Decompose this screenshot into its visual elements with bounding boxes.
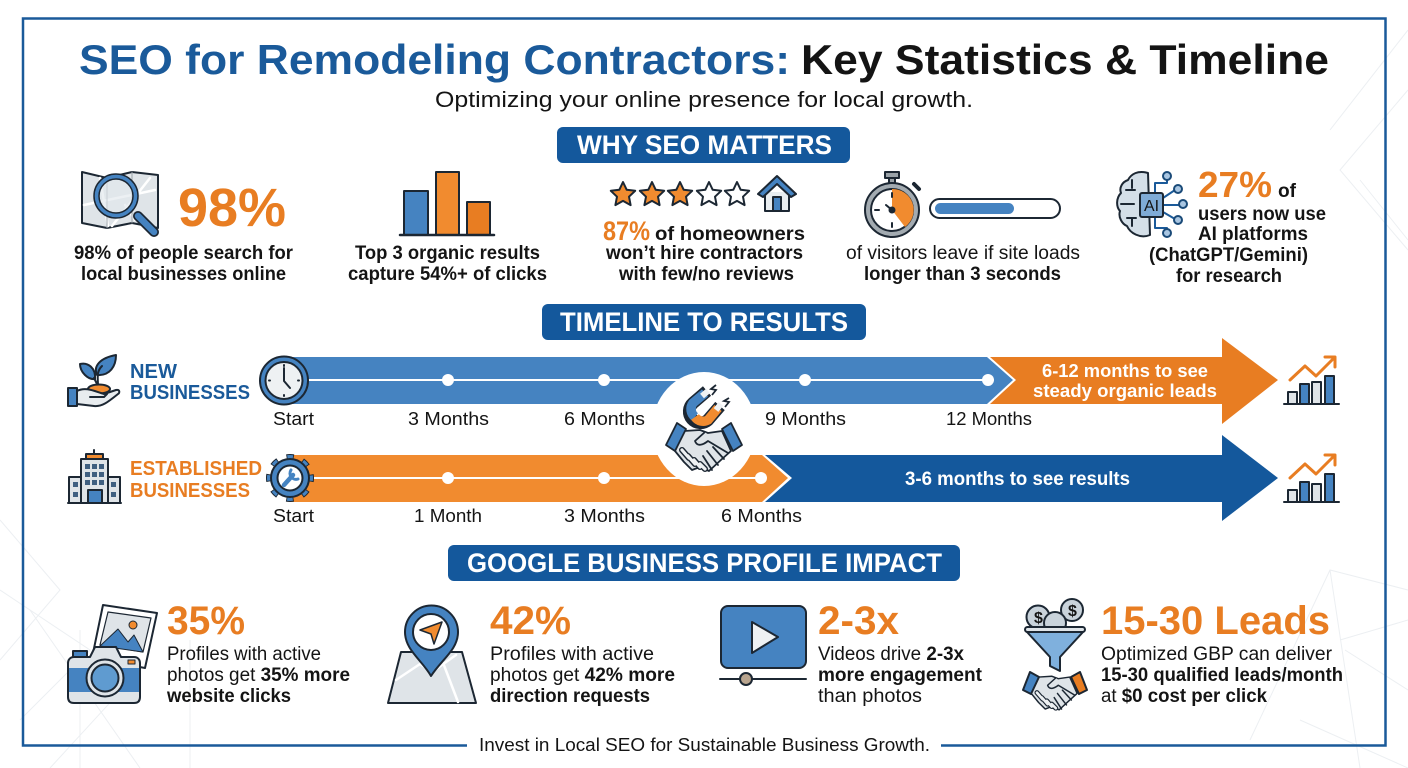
caption: 98% of people search for xyxy=(74,243,294,264)
caption: at $0 cost per click xyxy=(1101,686,1267,707)
icon: funnel, coins and handshake xyxy=(1023,599,1087,710)
tick labels xyxy=(273,506,802,526)
icon: gear and wrench xyxy=(270,458,310,498)
heading: why SEO matters: WHY SEO MATTERS xyxy=(577,130,832,160)
title: SEO for Remodeling Contractors: xyxy=(79,36,790,83)
icon: map pin xyxy=(388,606,476,703)
caption: photos get 35% more xyxy=(167,665,350,686)
tick labels xyxy=(273,409,1032,429)
panel: AI platforms xyxy=(1117,164,1326,287)
caption xyxy=(818,644,983,707)
stat: 42% xyxy=(490,599,571,643)
icon: AI brain xyxy=(1117,172,1187,237)
arrow text: 3-6 months to see results xyxy=(905,469,1130,490)
caption: than photos xyxy=(818,686,922,707)
title: Key Statistics & Timeline xyxy=(801,36,1329,83)
panel: photos 35% xyxy=(68,599,350,707)
panel: reviews xyxy=(603,176,805,285)
footer tagline: Invest in Local SEO for Sustainable Business Growth. xyxy=(479,735,930,755)
caption xyxy=(1101,644,1343,707)
icon: stopwatch xyxy=(865,172,919,237)
panel: top 3 results xyxy=(348,172,547,285)
label: BUSINESSES xyxy=(130,382,250,404)
caption: Profiles with active xyxy=(490,644,654,665)
caption xyxy=(490,644,675,707)
caption xyxy=(846,243,1080,285)
icon: progress bar xyxy=(930,199,1060,218)
caption: Profiles with active xyxy=(167,644,321,665)
stat: 98%: 98% xyxy=(178,178,286,238)
heading: timeline to results: TIMELINE TO RESULTS xyxy=(560,307,848,337)
timeline row: new businesses xyxy=(68,338,1339,429)
tick labels: Start xyxy=(273,506,314,526)
panel: video 2-3x xyxy=(720,599,983,707)
tick labels: Start xyxy=(273,409,314,429)
tick labels: 3 Months xyxy=(408,409,489,429)
caption: local businesses online xyxy=(81,264,286,285)
tick labels: 3 Months xyxy=(564,506,645,526)
stat: 2-3x xyxy=(818,599,899,643)
icon: map and magnifier xyxy=(82,172,158,232)
caption: Videos drive 2-3x xyxy=(818,644,964,665)
icon: bar chart xyxy=(400,172,494,235)
caption: more engagement xyxy=(818,665,983,686)
caption: of homeowners xyxy=(655,224,805,245)
tick labels: 9 Months xyxy=(765,409,846,429)
caption: capture 54%+ of clicks xyxy=(348,264,547,285)
stat: 27%: 27% xyxy=(1198,164,1272,205)
icon: office building xyxy=(68,450,121,503)
icon: camera and photo xyxy=(68,605,157,703)
label: ESTABLISHED xyxy=(130,458,262,480)
caption: (ChatGPT/Gemini) xyxy=(1149,245,1308,266)
icon: funnel, coins and handshake: $ xyxy=(1068,603,1077,620)
arrow text: 6-12 months to see xyxy=(1042,361,1208,381)
caption: 87% xyxy=(603,216,650,246)
caption: with few/no reviews xyxy=(618,264,794,285)
caption: longer than 3 seconds xyxy=(864,264,1061,285)
tick labels: 1 Month xyxy=(414,506,482,526)
icon: plant in hand xyxy=(68,355,119,406)
caption xyxy=(166,644,350,707)
caption: website clicks xyxy=(166,686,291,707)
icon: video player xyxy=(720,606,806,685)
panel: directions 42% xyxy=(388,599,675,707)
bar: orange timeline xyxy=(290,455,788,502)
panel: load speed xyxy=(846,172,1080,285)
icon: magnet and handshake badge xyxy=(652,372,756,486)
stat: 35% xyxy=(167,599,245,643)
caption: 15-30 qualified leads/month xyxy=(1101,665,1343,686)
bar: blue timeline xyxy=(284,357,1013,404)
icon: funnel, coins and handshake: $ xyxy=(1034,610,1043,627)
icon: growth chart xyxy=(1284,357,1339,404)
arrow: result orange xyxy=(990,338,1278,424)
stat: 15-30 Leads xyxy=(1101,599,1330,643)
caption: won’t hire contractors xyxy=(605,243,803,264)
arrow: result blue xyxy=(765,435,1278,521)
tick labels: 6 Months xyxy=(564,409,645,429)
timeline row: established businesses xyxy=(68,435,1339,526)
icon: house xyxy=(758,176,796,211)
caption: AI platforms xyxy=(1198,224,1308,245)
icon: AI brain: AI xyxy=(1144,198,1159,215)
caption: users now use xyxy=(1198,204,1326,225)
caption: of visitors leave if site loads xyxy=(846,243,1080,264)
caption: direction requests xyxy=(490,686,650,707)
caption: photos get 42% more xyxy=(490,665,675,686)
caption: Optimized GBP can deliver xyxy=(1101,644,1333,665)
icon: clock xyxy=(260,356,308,404)
heading: Google Business Profile impact: GOOGLE BUSINESS PROFILE IMPACT xyxy=(467,548,942,578)
arrow text: steady organic leads xyxy=(1033,381,1217,401)
subtitle: Optimizing your online presence for local growth. xyxy=(435,87,973,112)
panel: 98% local search xyxy=(74,172,294,285)
icon: star rating xyxy=(611,182,749,205)
tick labels: 12 Months xyxy=(946,409,1032,429)
label: BUSINESSES xyxy=(130,480,250,502)
caption: Top 3 organic results xyxy=(355,243,540,264)
tick labels: 6 Months xyxy=(721,506,802,526)
label: NEW xyxy=(130,361,177,383)
stat: 27%: of xyxy=(1278,181,1297,202)
caption: for research xyxy=(1176,266,1282,287)
panel: leads 15-30 xyxy=(1023,599,1343,710)
icon: growth chart xyxy=(1284,455,1339,502)
